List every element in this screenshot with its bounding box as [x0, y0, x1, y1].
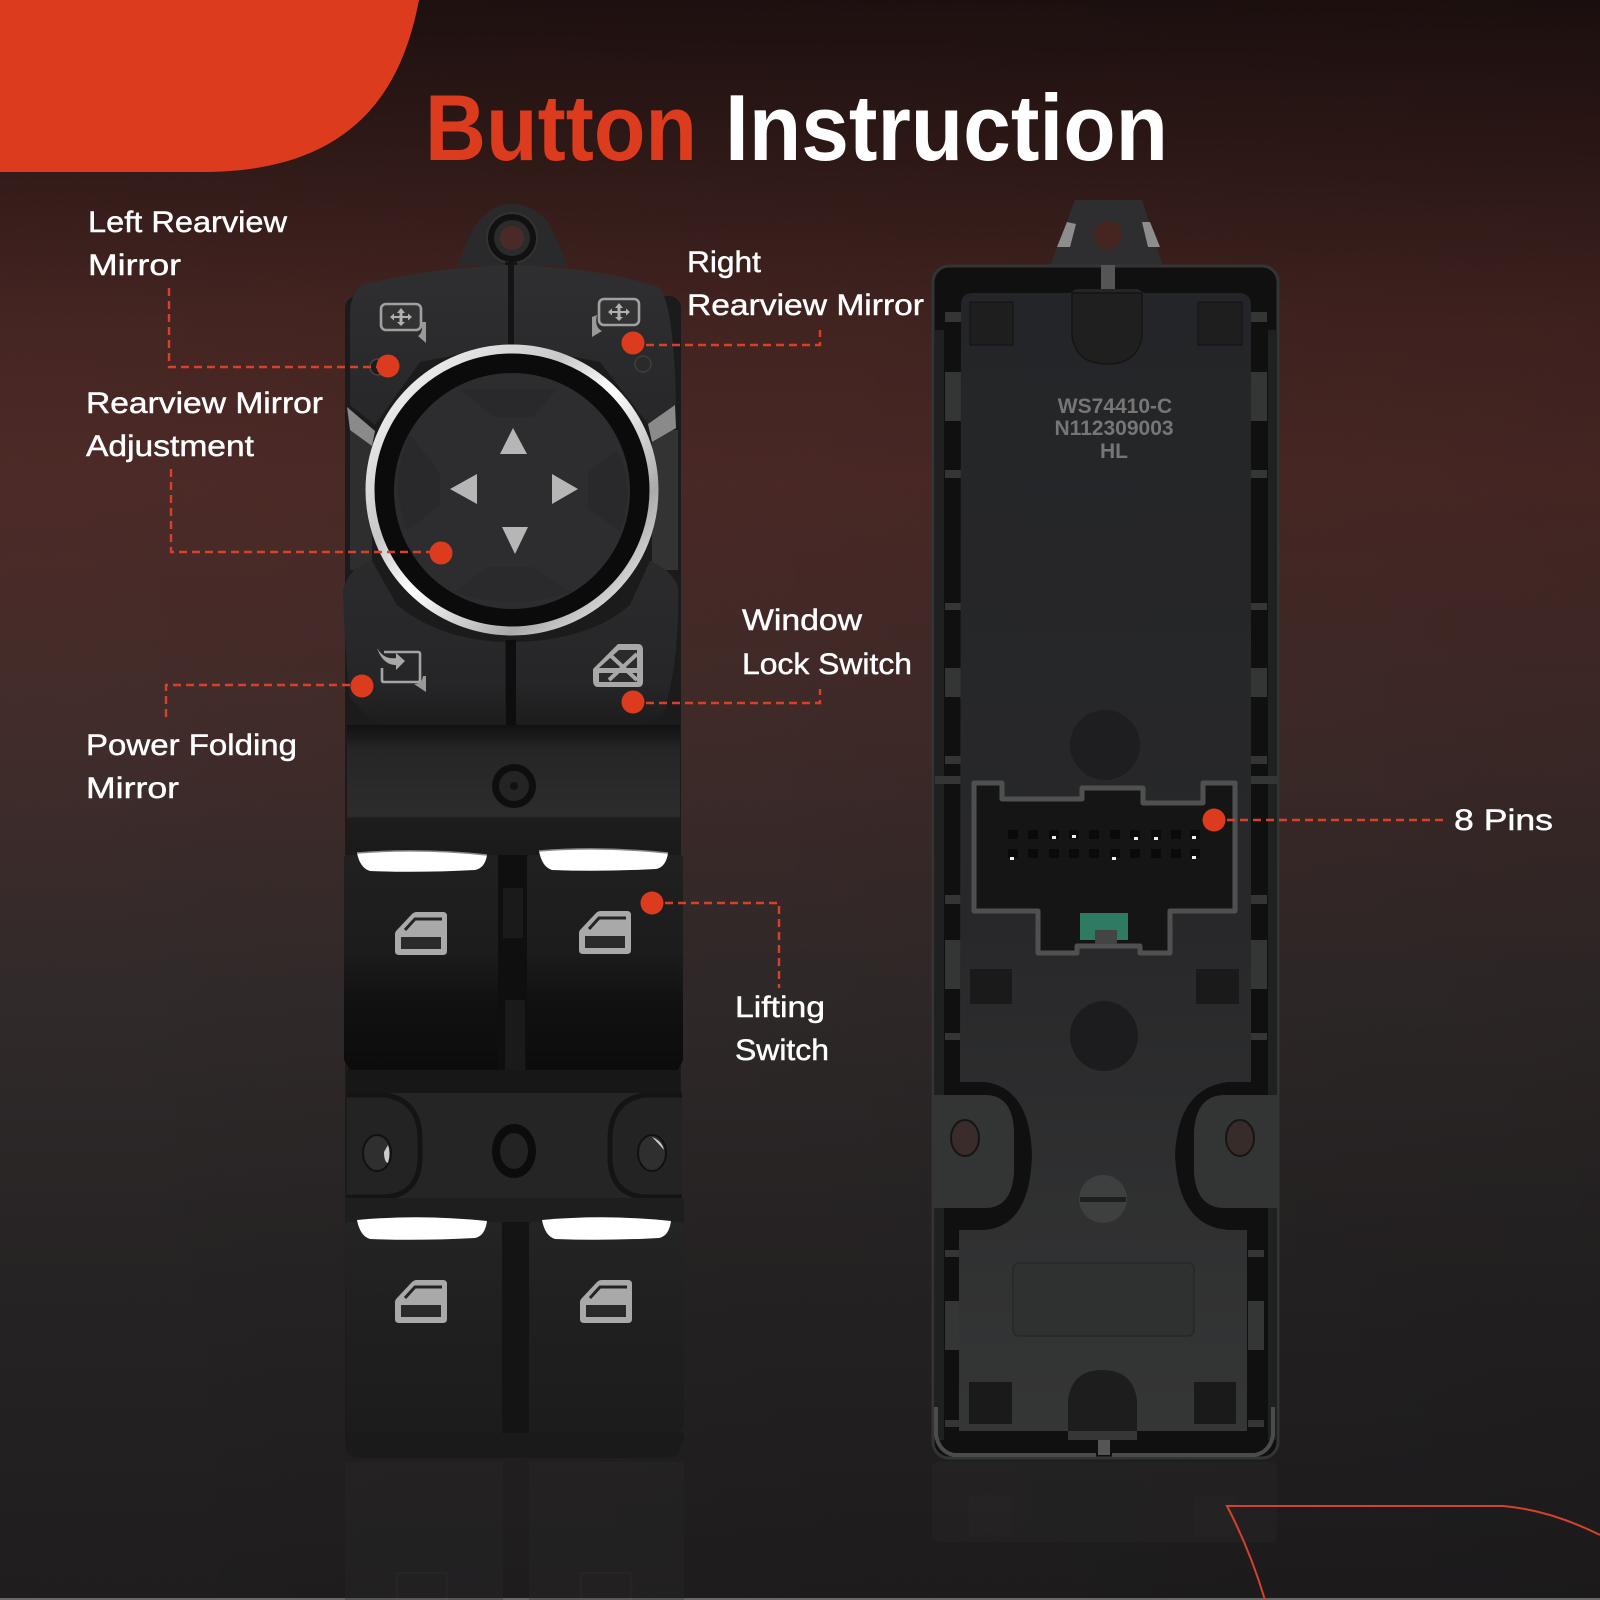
decorative red outline corner	[1227, 1506, 1600, 1600]
callout: left rearview mirror: Left Rearview	[88, 206, 287, 239]
icon: door upper left	[395, 912, 447, 955]
mirror select buttons top	[347, 265, 676, 446]
reflection of left switch	[345, 1462, 684, 1600]
mounting ears	[934, 1095, 1278, 1208]
connector socket	[974, 783, 1235, 953]
part number text	[1054, 395, 1174, 463]
red corner shape	[0, 0, 419, 172]
plate recesses	[969, 293, 1242, 1431]
callout: right rearview mirror	[622, 246, 924, 354]
icon: door upper right	[579, 911, 631, 954]
icon: right mirror select	[592, 299, 639, 337]
title	[425, 75, 1168, 180]
switch body base	[345, 296, 681, 1458]
mounting tab with eyelet	[458, 204, 567, 266]
title: Button	[425, 75, 697, 180]
callout: power folding mirror: Power Folding	[86, 729, 297, 762]
part number text: WS74410-C	[1058, 395, 1172, 418]
callout: power folding mirror	[86, 674, 374, 805]
part number text: N112309003	[1054, 417, 1174, 440]
callout: right rearview mirror: Rearview Mirror	[687, 289, 924, 322]
housing shell	[933, 266, 1278, 1458]
dial arrows	[450, 428, 578, 554]
connector pins	[1008, 830, 1200, 860]
rear mounting tab	[1050, 200, 1163, 266]
part number text: HL	[1100, 440, 1128, 463]
icon: left mirror select	[381, 304, 426, 343]
rear plate	[959, 289, 1251, 1440]
callout: window lock switch: Lock Switch	[742, 648, 912, 681]
upper lifting switches	[344, 849, 683, 1075]
callout: lifting switch	[640, 892, 829, 1067]
callout: power folding mirror: Mirror	[86, 772, 179, 805]
side rails and ticks	[935, 312, 1277, 1440]
callout: window lock switch	[622, 604, 912, 714]
callout: 8 pins	[1202, 804, 1553, 837]
callout: rearview mirror adjustment	[86, 387, 452, 564]
title: Instruction	[725, 75, 1168, 180]
right housing: rear view	[933, 200, 1278, 1458]
left switch: front view	[343, 204, 684, 1458]
middle section with screw	[347, 725, 680, 855]
callout: lifting switch: Lifting	[735, 991, 825, 1024]
lower mounting section	[347, 1070, 682, 1198]
callout: rearview mirror adjustment: Rearview Mirror	[86, 387, 323, 420]
icon: power folding mirror	[377, 648, 426, 692]
callout: right rearview mirror: Right	[687, 246, 762, 279]
callout: 8 pins: 8 Pins	[1454, 804, 1553, 837]
top centre clip	[1101, 265, 1115, 295]
callout: window lock switch: Window	[742, 604, 862, 637]
lower lifting switches	[345, 1198, 684, 1458]
icon: window lock	[593, 644, 643, 687]
callout: rearview mirror adjustment: Adjustment	[86, 430, 255, 463]
small indicator circles	[370, 356, 652, 626]
chrome ring mirror dial	[370, 349, 654, 631]
icon: door lower left	[395, 1280, 447, 1323]
icon: door lower right	[580, 1280, 632, 1323]
bottom lip	[936, 1407, 1273, 1455]
bottom panels	[343, 561, 678, 740]
callout: lifting switch: Switch	[735, 1034, 829, 1067]
callout: left rearview mirror	[88, 206, 400, 378]
reflection of right housing	[932, 1462, 1277, 1542]
callout: left rearview mirror: Mirror	[88, 249, 181, 282]
